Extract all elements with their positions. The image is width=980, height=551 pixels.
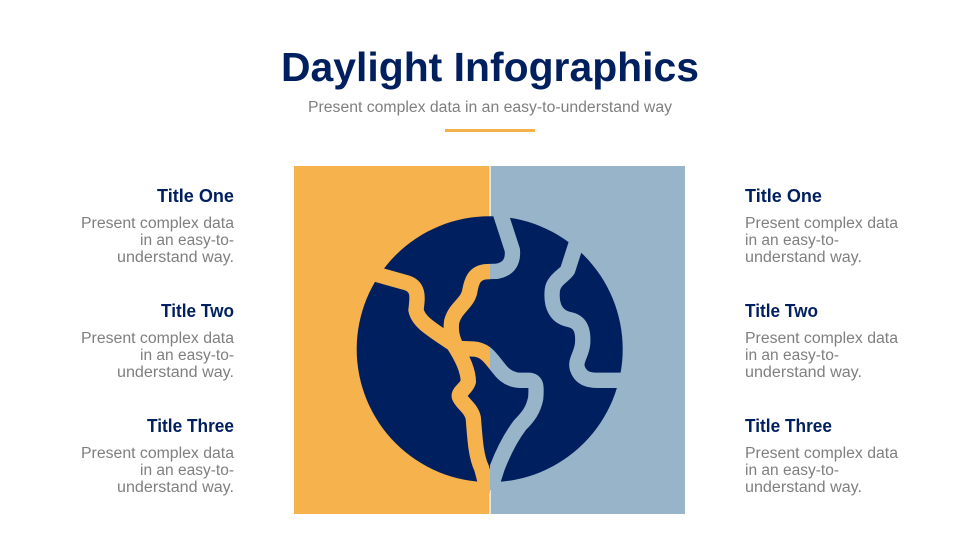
left item one: Present complex data <box>81 215 234 232</box>
right item three <box>745 415 898 496</box>
left item two: Present complex data <box>81 330 234 347</box>
blue right half <box>490 166 685 514</box>
left item two <box>81 300 234 381</box>
right item one: Title One <box>745 185 822 206</box>
title: Daylight Infographics <box>281 44 699 90</box>
right item one: Present complex data <box>745 215 898 232</box>
right item one: understand way. <box>745 249 862 266</box>
left item one: Title One <box>157 185 234 206</box>
right item one <box>745 185 898 266</box>
right item three: understand way. <box>745 479 862 496</box>
continent gaps, orange side <box>375 264 490 493</box>
left item two: Title Two <box>161 300 234 321</box>
orange left half <box>294 166 490 514</box>
title underline accent <box>445 129 535 132</box>
subtitle: Present complex data in an easy-to-understand way <box>308 99 672 116</box>
left item one <box>81 185 234 266</box>
left item three: Present complex data <box>81 445 234 462</box>
left item three: Title Three <box>147 415 234 436</box>
icon: globe disc <box>357 216 623 482</box>
centre divider line <box>489 166 491 514</box>
left item two: understand way. <box>117 364 234 381</box>
right item two: in an easy-to- <box>745 347 839 364</box>
panel: central split background with globe <box>294 166 685 514</box>
right item three: Title Three <box>745 415 832 436</box>
left item one: in an easy-to- <box>140 232 234 249</box>
right item one: in an easy-to- <box>745 232 839 249</box>
right item two: understand way. <box>745 364 862 381</box>
right item two <box>745 300 898 381</box>
right item three: in an easy-to- <box>745 462 839 479</box>
left item three <box>81 415 234 496</box>
left item two: in an easy-to- <box>140 347 234 364</box>
right item two: Present complex data <box>745 330 898 347</box>
right item two: Title Two <box>745 300 818 321</box>
left item three: in an easy-to- <box>140 462 234 479</box>
left item three: understand way. <box>117 479 234 496</box>
right item three: Present complex data <box>745 445 898 462</box>
panel: right text column <box>745 185 898 496</box>
continent gaps, blue side <box>490 216 621 490</box>
left item one: understand way. <box>117 249 234 266</box>
panel: left text column <box>81 185 234 496</box>
